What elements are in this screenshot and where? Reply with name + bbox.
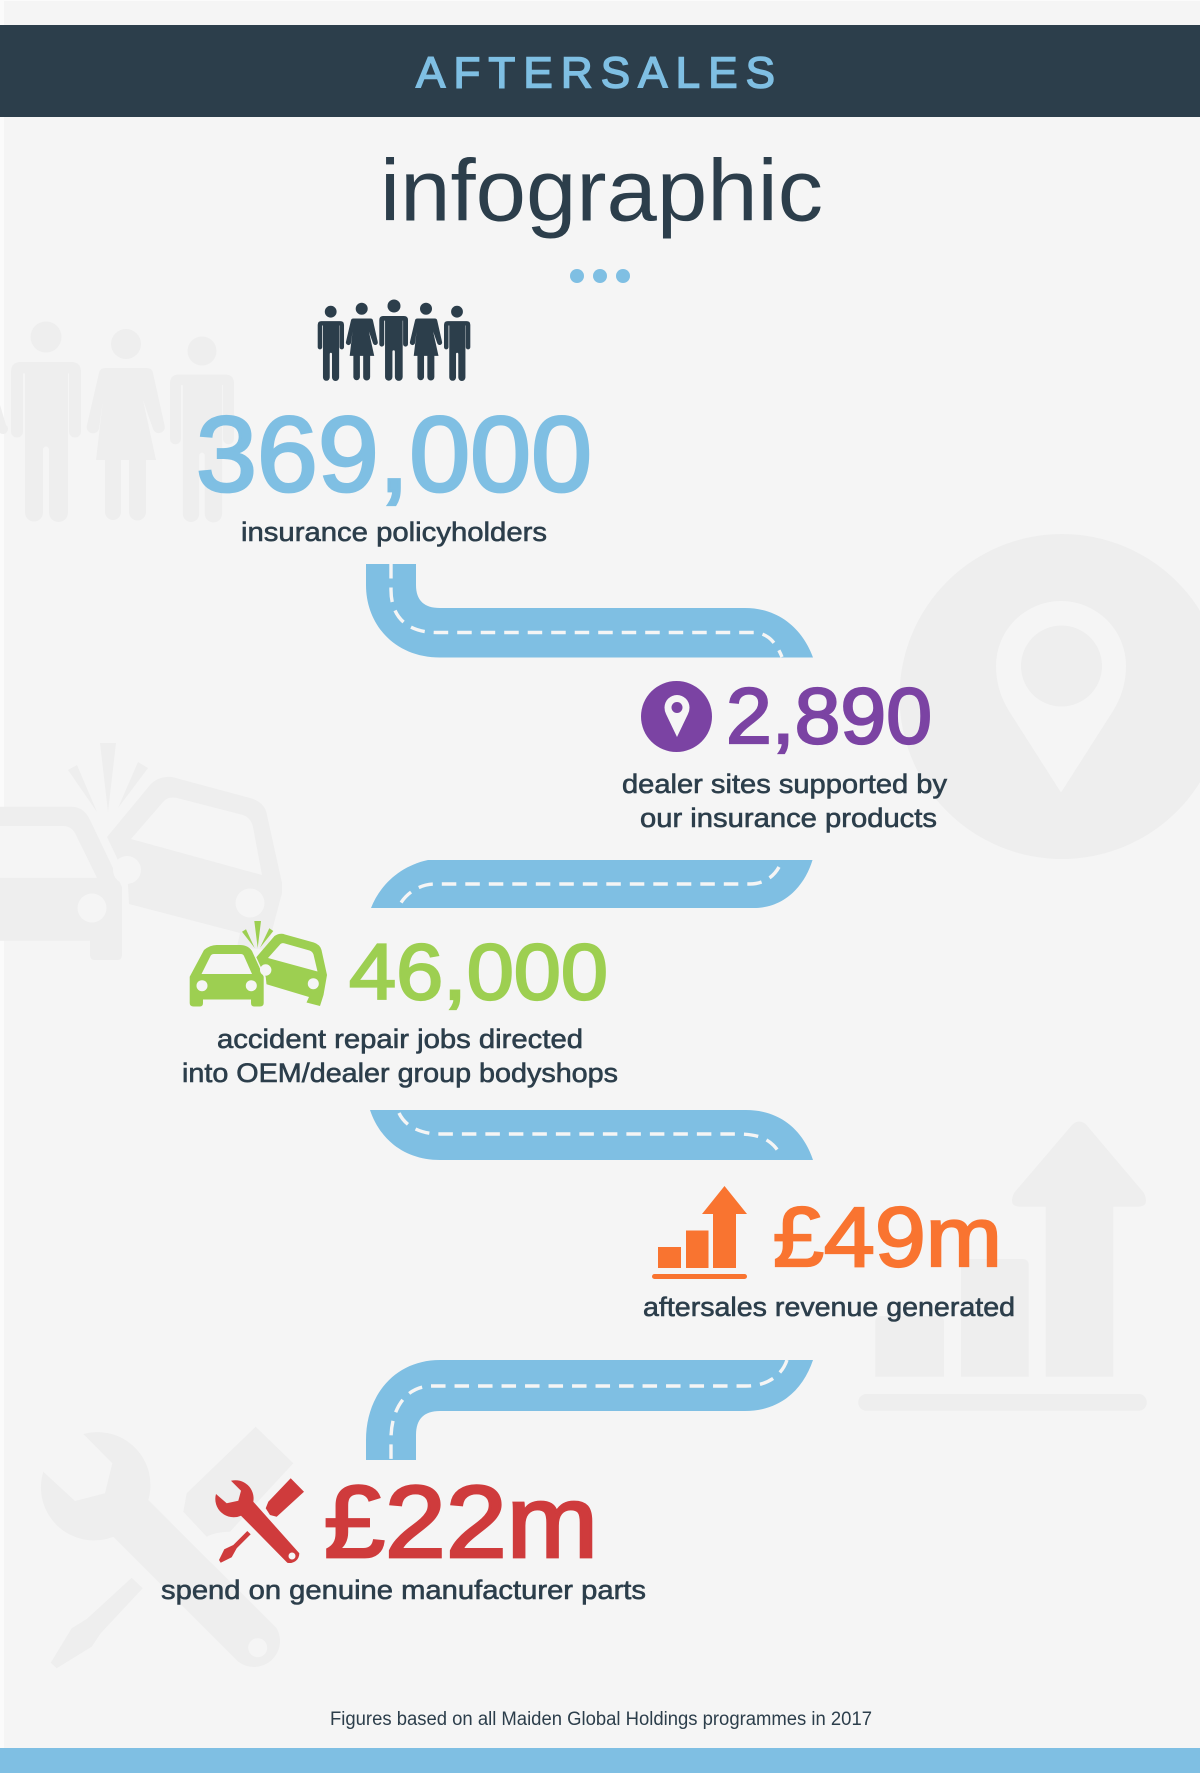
label: dealer sites supported by our insurance products bbox=[622, 769, 948, 833]
heading: AFTERSALES: AFTERSALES bbox=[416, 48, 775, 98]
label: insurance policyholders: insurance policyholders bbox=[241, 517, 547, 547]
stat: 2,890: 2,890 bbox=[726, 671, 932, 760]
footer band bbox=[0, 1748, 1200, 1773]
stat: £49m: £49m bbox=[773, 1190, 1002, 1284]
label: dealer sites supported by our insurance products: dealer sites supported by bbox=[622, 769, 948, 799]
label: accident repair jobs directed into OEM/dealer group bodyshops: accident repair jobs directed bbox=[217, 1024, 583, 1054]
stat: 369,000: 369,000 bbox=[196, 394, 592, 514]
icon: people group bbox=[318, 300, 470, 381]
decorative dots bbox=[570, 269, 630, 283]
label: aftersales revenue generated: aftersales revenue generated bbox=[643, 1292, 1015, 1322]
road segment 4 bbox=[366, 1360, 813, 1460]
icon: location pin in circle bbox=[641, 681, 712, 752]
background icon: rising bar chart bbox=[858, 1122, 1147, 1411]
header band bbox=[0, 25, 1200, 117]
stat: 46,000: 46,000 bbox=[349, 927, 608, 1016]
label: dealer sites supported by our insurance products: our insurance products bbox=[640, 803, 937, 833]
stat: £22m: £22m bbox=[324, 1465, 598, 1579]
road segment 2 bbox=[371, 860, 812, 908]
background icon: location pin bbox=[900, 534, 1200, 859]
road segment 1 bbox=[366, 564, 813, 658]
heading: infographic: infographic bbox=[380, 142, 823, 240]
icon: rising bars and arrow bbox=[652, 1186, 747, 1279]
road segment 3 bbox=[370, 1110, 813, 1160]
background icon: people bbox=[0, 322, 234, 522]
label: accident repair jobs directed into OEM/dealer group bodyshops bbox=[182, 1024, 618, 1088]
background icon: car crash bbox=[0, 743, 282, 960]
footnote: Figures based on all Maiden Global Holdings programmes in 2017 bbox=[330, 1709, 872, 1730]
background icon: wrench and screwdriver bbox=[41, 1427, 293, 1668]
icon: crashed cars bbox=[190, 921, 327, 1006]
icon: wrench and screwdriver bbox=[215, 1478, 304, 1563]
label: accident repair jobs directed into OEM/dealer group bodyshops: into OEM/dealer group bodyshops bbox=[182, 1058, 618, 1088]
label: spend on genuine manufacturer parts: spend on genuine manufacturer parts bbox=[161, 1575, 646, 1605]
